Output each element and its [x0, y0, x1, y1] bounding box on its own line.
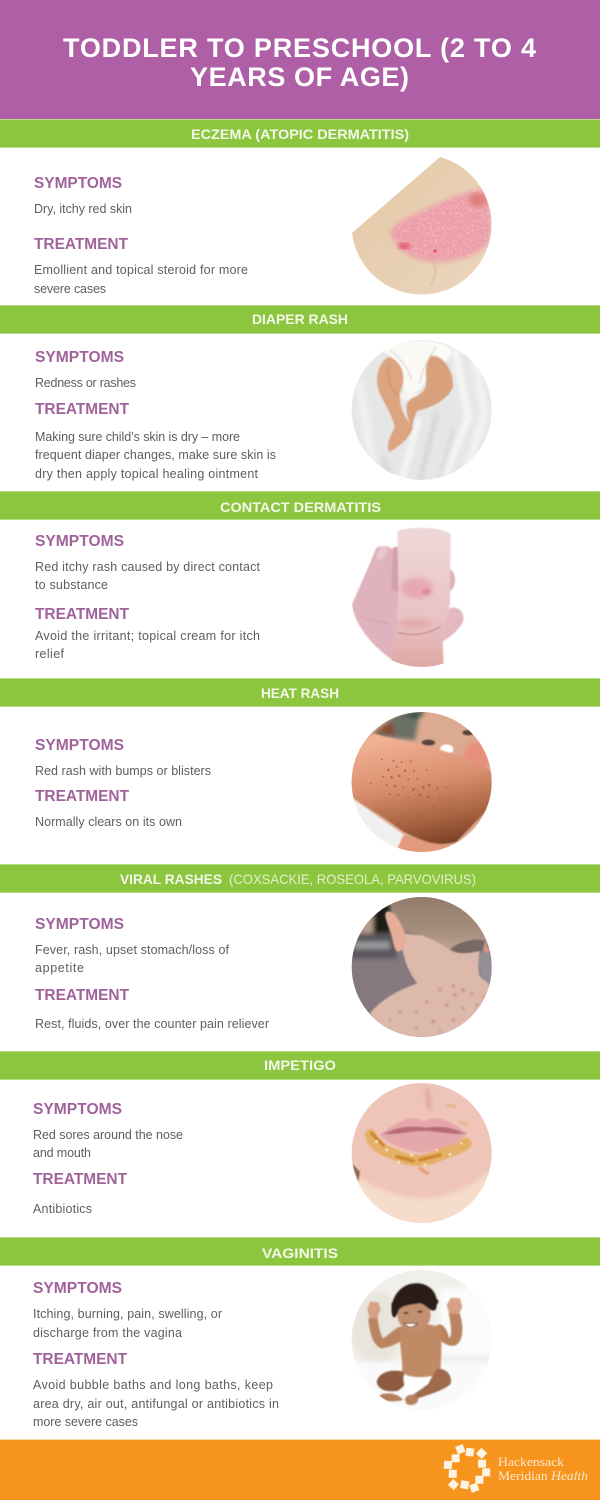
symptoms text: and mouth — [33, 1146, 91, 1160]
symptoms text — [33, 1280, 222, 1340]
section bar: viral rashes — [0, 864, 600, 893]
panel: vaginitis — [0, 1237, 600, 1429]
symptoms text: to substance — [35, 578, 108, 592]
symptoms text — [35, 916, 230, 975]
symptoms text: Red rash with bumps or blisters — [35, 764, 211, 778]
symptoms text: SYMPTOMS — [33, 1280, 122, 1297]
treatment text — [33, 1351, 279, 1429]
treatment text: area dry, air out, antifungal or antibiotics in — [33, 1397, 279, 1411]
symptoms text: Itching, burning, pain, swelling, or — [33, 1307, 222, 1321]
title — [63, 33, 536, 92]
section bar: diaper rash — [0, 305, 600, 334]
logo wordmark — [498, 1455, 588, 1483]
header banner — [0, 0, 600, 119]
section bar: heat rash — [0, 678, 600, 707]
treatment text: TREATMENT — [35, 606, 129, 623]
symptoms text: Red itchy rash caused by direct contact — [35, 560, 261, 574]
section bar: contact dermatitis — [0, 491, 600, 520]
symptoms text — [35, 533, 261, 592]
treatment text: TREATMENT — [35, 987, 129, 1004]
section bar: vaginitis — [0, 1237, 600, 1266]
icon: Hackensack Meridian Health logo mark — [444, 1444, 490, 1493]
symptoms text: SYMPTOMS — [35, 533, 124, 550]
symptoms text — [35, 349, 136, 390]
section bar: eczema: ECZEMA (ATOPIC DERMATITIS) — [191, 126, 409, 142]
symptoms text: SYMPTOMS — [35, 916, 124, 933]
treatment text — [33, 1171, 127, 1216]
treatment text — [35, 987, 269, 1031]
symptoms text: SYMPTOMS — [34, 175, 122, 192]
treatment text: Antibiotics — [33, 1202, 92, 1216]
symptoms text: appetite — [35, 961, 84, 975]
treatment text: TREATMENT — [35, 788, 129, 805]
section bar: viral rashes: VIRAL RASHES — [120, 871, 222, 887]
treatment text: Normally clears on its own — [35, 815, 182, 829]
treatment text: TREATMENT — [33, 1171, 127, 1188]
symptoms text: discharge from the vagina — [33, 1326, 182, 1340]
photo: hand holding child's arm with rash — [352, 528, 463, 670]
symptoms text — [33, 1101, 183, 1160]
treatment text — [35, 788, 182, 829]
photo: baby in diaper on white sheet — [352, 340, 492, 480]
treatment text — [35, 401, 276, 481]
treatment text: Avoid the irritant; topical cream for itch — [35, 629, 260, 643]
symptoms text — [35, 737, 211, 778]
section bar: vaginitis: VAGINITIS — [262, 1245, 338, 1261]
photo: red bumps on baby's arm — [352, 712, 492, 852]
panel: contact dermatitis — [0, 491, 600, 670]
panel: heat rash — [0, 678, 600, 857]
treatment text: Making sure child’s skin is dry – more — [35, 430, 240, 444]
treatment text: Emollient and topical steroid for more — [34, 263, 248, 277]
treatment text: more severe cases — [33, 1415, 138, 1429]
section bar: diaper rash: DIAPER RASH — [252, 311, 348, 327]
treatment text: TREATMENT — [33, 1351, 127, 1368]
logo wordmark: Hackensack — [498, 1455, 565, 1469]
photo: eczema patch on skin — [352, 157, 492, 294]
treatment text: relief — [35, 647, 65, 661]
photo: rash on toddler's neck and back — [352, 897, 492, 1037]
panel: diaper rash — [0, 305, 600, 483]
footer bar — [0, 1439, 600, 1500]
treatment text: severe cases — [34, 282, 106, 296]
photo: smiling baby sitting on white bedding — [352, 1270, 490, 1406]
symptoms text: SYMPTOMS — [33, 1101, 122, 1118]
logo wordmark: Meridian Health — [498, 1469, 588, 1483]
section bar: contact dermatitis: CONTACT DERMATITIS — [220, 499, 381, 515]
panel: eczema — [0, 119, 600, 305]
treatment text: Rest, fluids, over the counter pain reliever — [35, 1017, 269, 1031]
symptoms text — [34, 175, 132, 216]
panel: impetigo — [0, 1051, 600, 1228]
section bar: eczema — [0, 119, 600, 148]
panel: viral rashes — [0, 864, 600, 1043]
section bar: heat rash: HEAT RASH — [261, 685, 339, 701]
section bar: impetigo: IMPETIGO — [264, 1057, 336, 1073]
symptoms text: SYMPTOMS — [35, 737, 124, 754]
treatment text — [35, 606, 260, 661]
treatment text — [34, 236, 248, 296]
section bar: viral rashes: (COXSACKIE, ROSEOLA, PARVOVIRUS) — [229, 871, 476, 887]
symptoms text: SYMPTOMS — [35, 349, 124, 366]
symptoms text: Red sores around the nose — [33, 1128, 183, 1142]
section bar: impetigo — [0, 1051, 600, 1080]
photo: crusted sores around mouth — [352, 1083, 492, 1223]
treatment text: TREATMENT — [34, 236, 128, 253]
symptoms text: Dry, itchy red skin — [34, 202, 132, 216]
treatment text: TREATMENT — [35, 401, 129, 418]
treatment text: frequent diaper changes, make sure skin is — [35, 448, 276, 462]
treatment text: dry then apply topical healing ointment — [35, 467, 259, 481]
symptoms text: Redness or rashes — [35, 376, 136, 390]
title: TODDLER TO PRESCHOOL (2 TO 4 — [63, 33, 536, 63]
title: YEARS OF AGE) — [190, 62, 409, 92]
treatment text: Avoid bubble baths and long baths, keep — [33, 1378, 273, 1392]
symptoms text: Fever, rash, upset stomach/loss of — [35, 943, 230, 957]
